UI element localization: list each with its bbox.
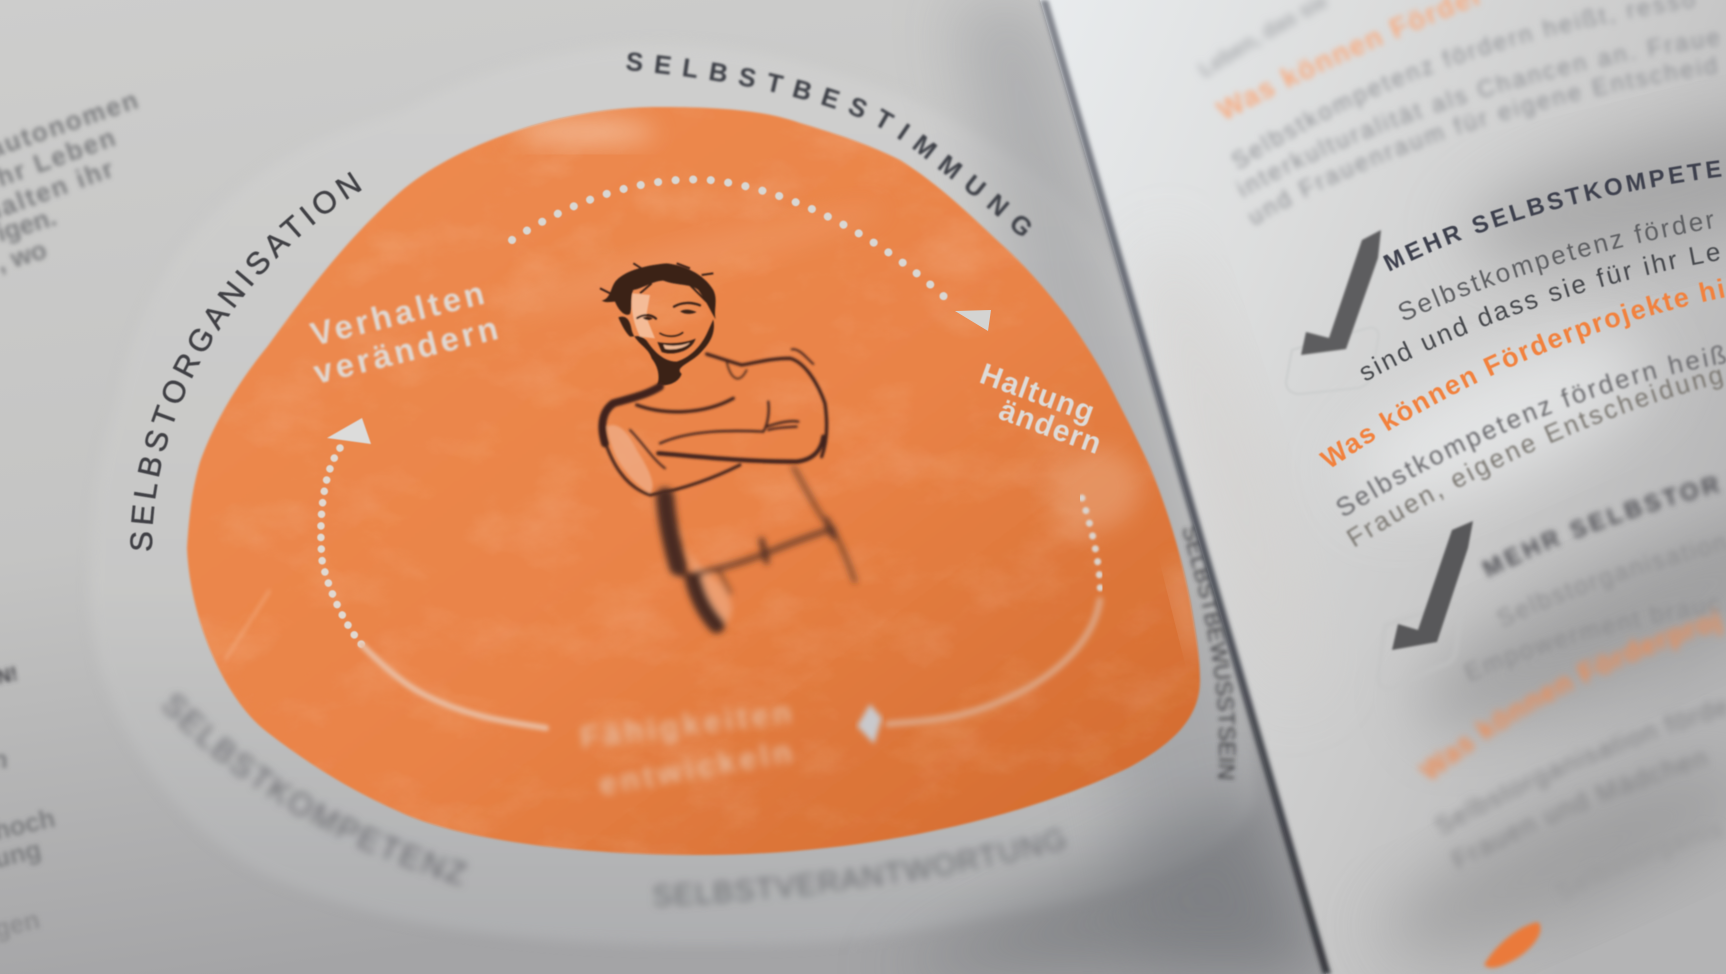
right page: second body text [1464, 538, 1724, 680]
ring label: Selbstkompetenz: SELBSTKOMPETENZ [160, 691, 469, 888]
label: Verhalten verändern: verändern [310, 308, 505, 391]
label: bottom loop station [578, 694, 798, 802]
right page: body text 2 [1336, 344, 1726, 548]
label: Verhalten verändern [307, 273, 505, 391]
left book page [0, 0, 1340, 974]
illustration: man with crossed arms [600, 263, 855, 625]
book gutter shadow [950, 0, 1330, 974]
figure head [600, 263, 716, 385]
left page text column [0, 84, 143, 944]
figure torso and arms [602, 349, 827, 495]
right page: check icon 1 [1286, 230, 1381, 394]
right book page [1040, 0, 1726, 974]
ring label: Selbstbewusstsein: SELBSTBEWUSSTSEIN [1180, 525, 1238, 782]
ring label: Selbstverantwortung: SELBSTVERANTWORTUNG [652, 826, 1068, 909]
ring label: Selbstorganisation: SELBSTORGANISATION [129, 171, 362, 552]
label: bottom loop station: entwickeln [596, 733, 798, 802]
label: Haltung ändern [976, 358, 1107, 461]
label: Verhalten verändern: Verhalten [307, 273, 491, 353]
label: bottom loop station: Fähigkeiten [578, 694, 797, 755]
right page: top paragraph [1197, 0, 1720, 226]
diagram ring [89, 44, 1255, 945]
orange blob panel [180, 100, 1210, 860]
right page: orange pill marker [1484, 922, 1540, 968]
label: Haltung ändern: ändern [995, 394, 1107, 461]
figure lower body [665, 467, 855, 625]
label: Haltung ändern: Haltung [976, 358, 1100, 430]
bottom shadow below ring [880, 790, 1320, 974]
right page: check icon 2 [1378, 521, 1473, 689]
gutter line [1040, 0, 1331, 974]
ring label: Selbstbestimmung: SELBSTBESTIMMUNG [625, 50, 1032, 237]
right page: body text 1 [1360, 214, 1720, 381]
dotted arrow: left arc [321, 418, 546, 728]
dotted arrow: top arc [512, 179, 991, 331]
dotted arrow: right arc [857, 498, 1100, 744]
